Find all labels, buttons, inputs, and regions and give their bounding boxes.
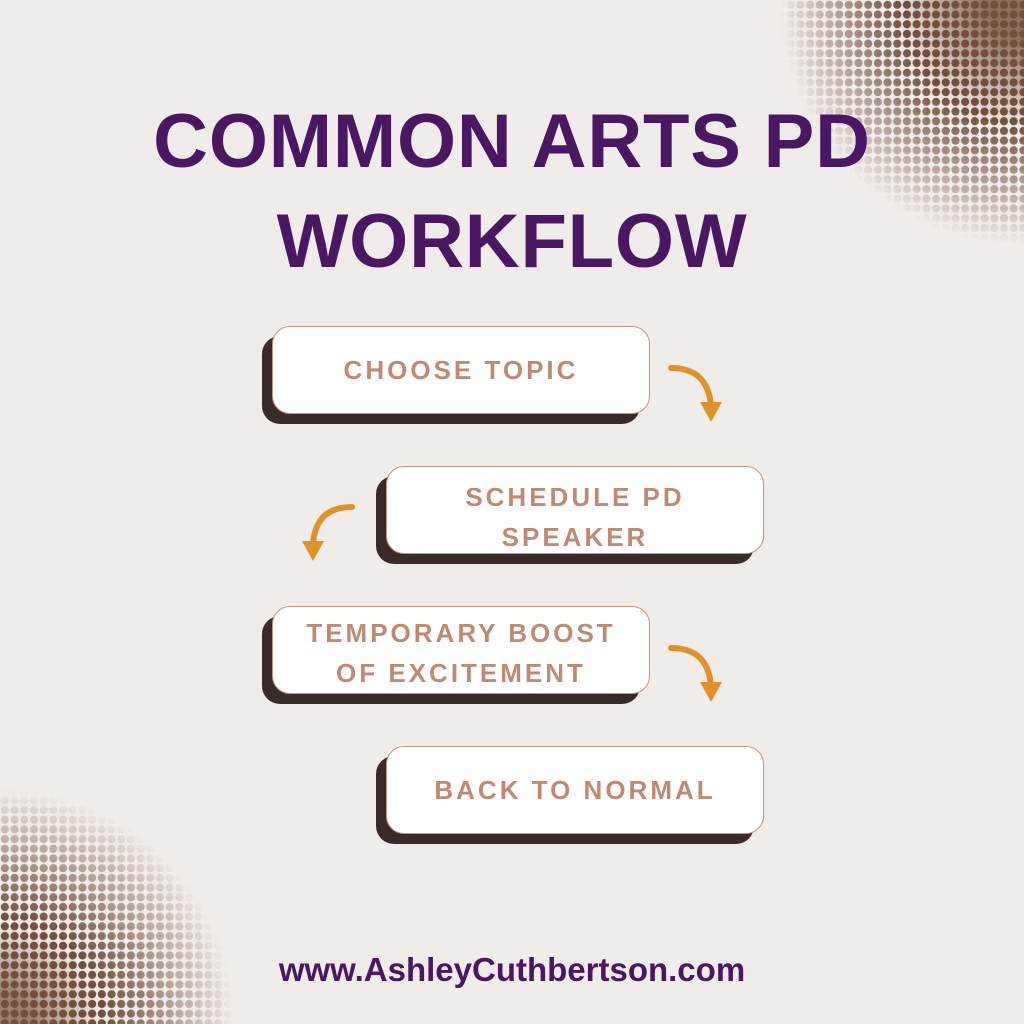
step 4: back to normal: BACK TO NORMAL: [434, 775, 716, 805]
step 1: choose topic: [272, 326, 650, 414]
step 4: back to normal: [386, 746, 764, 834]
step 3: temporary boost: OF EXCITEMENT: [336, 658, 586, 688]
step 2: schedule pd speaker: [386, 466, 764, 554]
arrow 2: [302, 504, 355, 561]
step 1: choose topic: CHOOSE TOPIC: [344, 355, 578, 385]
title: COMMON ARTS PD: [153, 99, 871, 184]
halftone corner bottom-left: [0, 790, 234, 1024]
footer url: www.AshleyCuthbertson.com: [279, 951, 745, 988]
arrow 1: [668, 365, 722, 422]
arrow 3: [668, 645, 722, 702]
title: WORKFLOW: [277, 199, 747, 284]
step 3: temporary boost: [272, 606, 650, 694]
step 2: schedule pd speaker: SPEAKER: [502, 522, 648, 552]
title: [153, 99, 871, 284]
step 2: schedule pd speaker: SCHEDULE PD: [465, 482, 685, 512]
step 3: temporary boost: TEMPORARY BOOST: [306, 618, 616, 648]
